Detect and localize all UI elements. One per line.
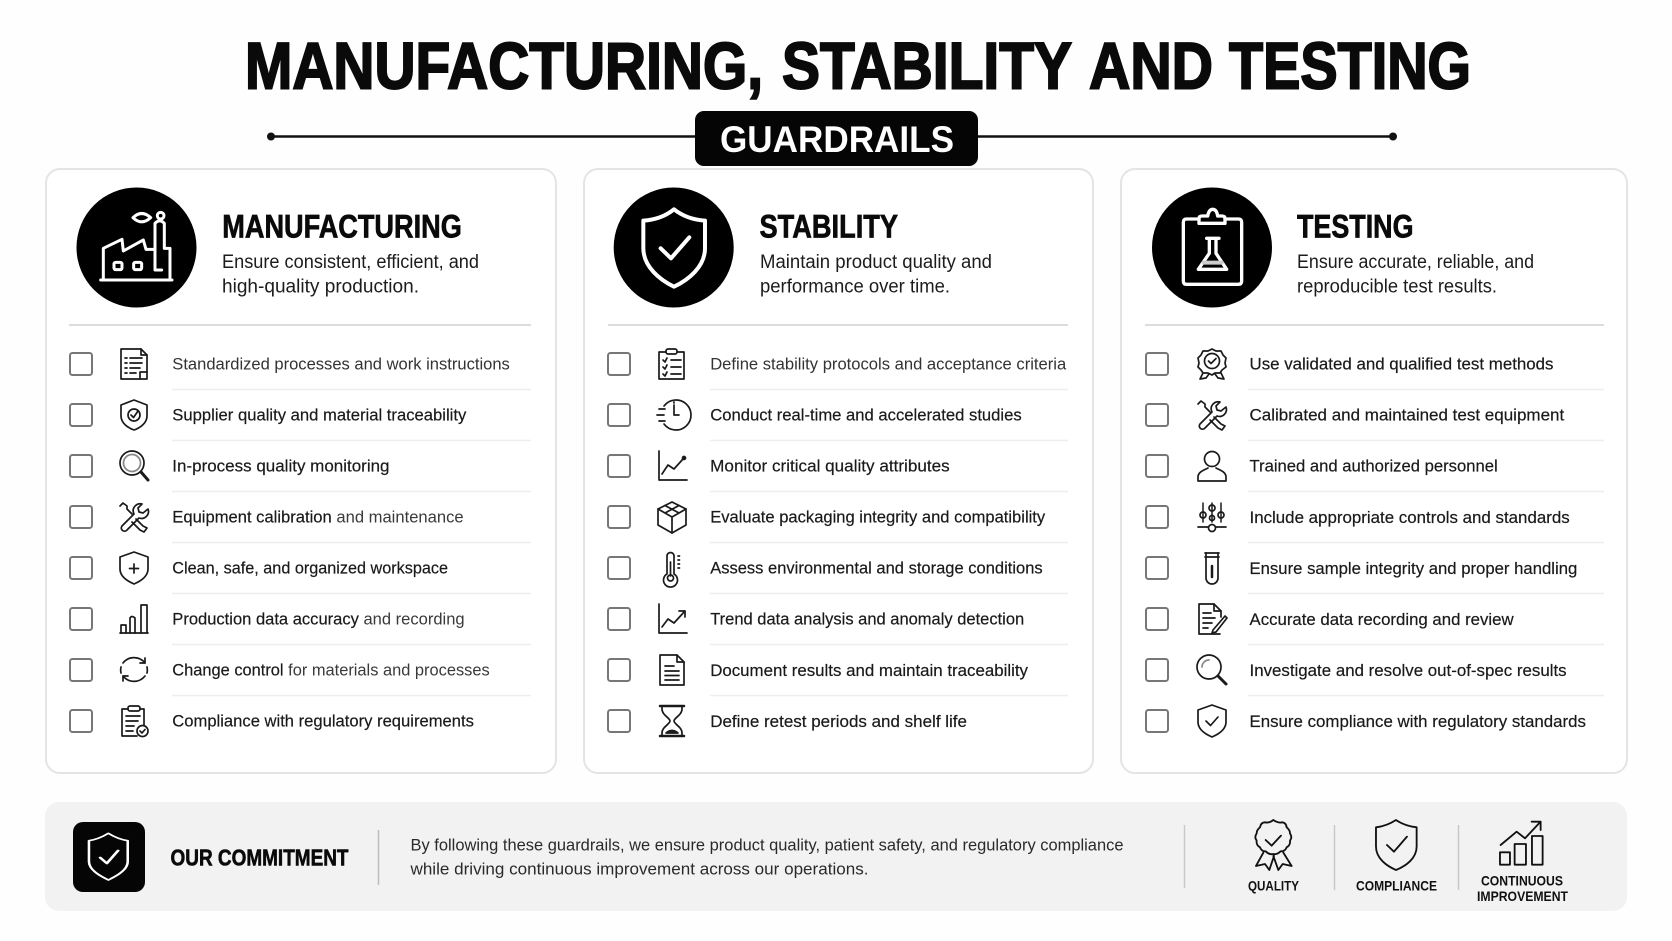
checklist row 2 <box>608 400 1022 430</box>
text: Clean, safe, and organized workspace <box>172 558 448 577</box>
text: Compliance with regulatory requirements <box>172 711 474 730</box>
icon: clipboard with badge <box>122 706 148 736</box>
checklist row 5 <box>1146 553 1577 584</box>
icon: package box <box>658 502 686 533</box>
icon: shield check <box>614 188 734 308</box>
description: manufacturing: Ensure consistent, efficient, and <box>222 252 479 273</box>
subtitle badge: guardrails: GUARDRAILS <box>720 119 954 160</box>
checklist row 1 <box>70 349 510 379</box>
icon: clipboard flask <box>1152 188 1272 308</box>
badge: quality <box>1248 820 1300 894</box>
checklist row 3 <box>608 451 950 480</box>
checklist row 8 <box>608 706 967 736</box>
description: manufacturing <box>222 252 479 298</box>
icon: tools <box>120 503 148 532</box>
commitment text: while driving continuous improvement across our operations. <box>409 860 868 878</box>
checklist row 3 <box>70 451 390 480</box>
title: STABILITY <box>782 28 1072 102</box>
text: Conduct real-time and accelerated studies <box>710 405 1022 424</box>
text: Supplier quality and material traceability <box>172 405 467 424</box>
subtitle badge: guardrails <box>695 111 978 166</box>
text: Equipment calibration and maintenance <box>172 507 464 526</box>
icon: tools <box>1198 401 1226 430</box>
text: Ensure compliance with regulatory standards <box>1250 712 1586 731</box>
label <box>1477 872 1568 904</box>
icon: document <box>660 655 684 685</box>
checklist row 2 <box>70 400 467 430</box>
panel: stability <box>584 169 1093 773</box>
text: Calibrated and maintained test equipment <box>1250 406 1564 425</box>
icon: factory <box>76 188 196 308</box>
text: Assess environmental and storage conditions <box>710 559 1043 578</box>
panel: our commitment <box>45 802 1627 911</box>
description: manufacturing: high-quality production. <box>222 276 419 298</box>
text: Ensure sample integrity and proper handling <box>1250 559 1577 578</box>
icon: trend chart <box>659 604 687 633</box>
subtitle rule with dots <box>267 132 1397 140</box>
description: testing: Ensure accurate, reliable, and <box>1297 252 1534 273</box>
icon: clipboard checklist <box>659 349 684 379</box>
text: Monitor critical quality attributes <box>710 456 950 475</box>
icon: document pen <box>1199 604 1227 634</box>
checklist row 6 <box>608 604 1024 633</box>
icon: shield with seal <box>121 400 147 430</box>
checklist row 1 <box>1146 349 1554 379</box>
label: COMPLIANCE <box>1356 878 1437 894</box>
badge: compliance <box>1356 820 1437 894</box>
checklist row 7 <box>608 655 1028 685</box>
checklist row 7 <box>1146 655 1567 684</box>
text: Document results and maintain traceability <box>710 661 1028 680</box>
checklist row 4 <box>70 503 464 532</box>
text: Production data accuracy and recording <box>172 609 465 628</box>
text: Use validated and qualified test methods <box>1250 354 1554 373</box>
text: In-process quality monitoring <box>172 456 390 475</box>
text: Standardized processes and work instructions <box>172 354 510 373</box>
icon: bar chart <box>120 605 148 633</box>
label: CONTINUOUS <box>1481 872 1563 888</box>
text: Trained and authorized personnel <box>1250 457 1498 476</box>
panel: testing <box>1121 169 1627 773</box>
checklist row 6 <box>70 605 465 633</box>
text: Trend data analysis and anomaly detection <box>710 610 1024 629</box>
text: Include appropriate controls and standards <box>1250 508 1570 527</box>
commitment text: By following these guardrails, we ensure product quality, patient safety, and regulatory compliance <box>410 836 1124 854</box>
checklist row 5 <box>70 552 448 584</box>
checklist row 3 <box>1146 452 1498 481</box>
title: TESTING <box>1229 28 1471 102</box>
icon: magnifier <box>1197 655 1226 684</box>
checklist row 8 <box>70 706 474 736</box>
checklist row 8 <box>1146 705 1586 737</box>
icon: person <box>1198 452 1226 481</box>
icon: change cycle arrows <box>121 658 147 681</box>
heading: stability: STABILITY <box>760 208 898 244</box>
icon: control sliders <box>1198 503 1226 532</box>
title: AND <box>1089 28 1213 102</box>
heading: our commitment: OUR COMMITMENT <box>170 844 348 870</box>
heading: testing: TESTING <box>1297 208 1414 244</box>
title: MANUFACTURING, <box>245 28 763 102</box>
icon: document list <box>121 349 147 379</box>
icon: hourglass <box>660 706 684 736</box>
description: stability: Maintain product quality and <box>760 252 992 273</box>
icon: thermometer <box>664 552 680 587</box>
checklist row 6 <box>1146 604 1514 634</box>
heading: manufacturing: MANUFACTURING <box>222 208 462 244</box>
icon: shield check <box>1198 705 1226 737</box>
text: Change control for materials and processes <box>172 660 490 679</box>
checklist row 7 <box>70 658 490 681</box>
icon: magnifier <box>120 451 148 480</box>
description: testing <box>1297 252 1534 298</box>
text: Define stability protocols and acceptance criteria <box>710 354 1067 373</box>
badge: continuous improvement <box>1477 822 1568 904</box>
text: Evaluate packaging integrity and compatibility <box>710 508 1046 526</box>
icon: test tube <box>1205 553 1219 584</box>
checklist row 2 <box>1146 401 1564 430</box>
text: Investigate and resolve out-of-spec results <box>1250 661 1567 680</box>
text: Accurate data recording and review <box>1250 610 1514 629</box>
checklist row 4 <box>608 502 1046 533</box>
panel: manufacturing <box>46 169 556 773</box>
description: stability: performance over time. <box>760 276 950 298</box>
checklist row 1 <box>608 349 1067 379</box>
text: Define retest periods and shelf life <box>710 712 967 731</box>
description: stability <box>760 252 992 298</box>
commitment text <box>409 836 1124 878</box>
description: testing: reproducible test results. <box>1297 276 1497 298</box>
checklist row 4 <box>1146 503 1570 532</box>
icon: shield plus <box>120 552 148 584</box>
checklist row 5 <box>608 552 1043 587</box>
icon: line chart <box>659 451 687 480</box>
label: QUALITY <box>1248 878 1300 894</box>
icon: rosette <box>1198 349 1226 379</box>
icon: clock speed <box>657 400 691 430</box>
title <box>245 28 1471 102</box>
label: IMPROVEMENT <box>1477 888 1568 904</box>
icon: commitment shield <box>73 822 145 892</box>
